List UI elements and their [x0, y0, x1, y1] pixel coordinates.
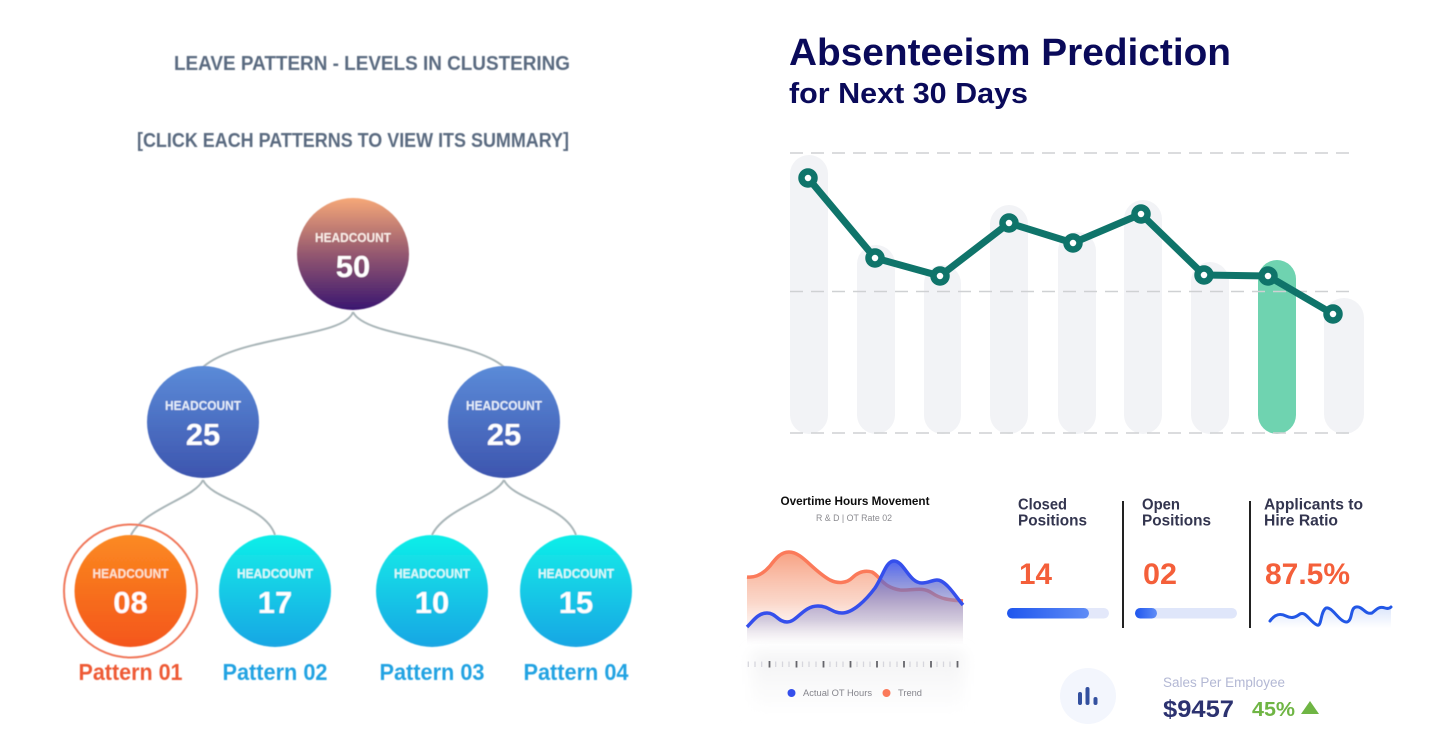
- node: headcount 25 left: 25: [186, 417, 220, 452]
- node: pattern 03: [376, 535, 488, 685]
- node: headcount 25 left: HEADCOUNT: [165, 398, 241, 413]
- kpi: open positions: Open: [1142, 496, 1180, 514]
- node: pattern 02: Pattern 02: [222, 659, 328, 685]
- panel: leave pattern clustering tree: [64, 53, 632, 685]
- line: trend: [747, 552, 963, 601]
- kpi: open positions: [1135, 496, 1237, 618]
- overtime title: Overtime Hours Movement: [780, 496, 930, 508]
- node: pattern 04: HEADCOUNT: [538, 566, 614, 581]
- node: pattern 04: Pattern 04: [524, 659, 629, 685]
- tree connectors: [131, 312, 576, 535]
- node: headcount 25 right: 25: [487, 417, 521, 452]
- legend: actual OT hours: Actual OT Hours: [803, 688, 873, 698]
- trend line: [808, 178, 1333, 314]
- kpi: applicants to hire ratio: [1264, 496, 1391, 628]
- kpi: closed positions: [1007, 496, 1109, 618]
- kpi: closed positions: 14: [1019, 558, 1052, 591]
- title: absenteeism prediction: for Next 30 Days: [789, 78, 1028, 110]
- title: absenteeism prediction: [789, 32, 1231, 110]
- card fade: [752, 652, 964, 714]
- instruction text: [CLICK EACH PATTERNS TO VIEW ITS SUMMARY]: [137, 130, 569, 152]
- area: actual: [747, 561, 963, 646]
- divider: [1249, 501, 1251, 628]
- area: trend: [747, 552, 963, 646]
- node: pattern 04: 15: [559, 585, 593, 620]
- kpi: closed positions: Closed: [1018, 496, 1067, 514]
- kpi: sales per employee: Sales Per Employee: [1163, 675, 1285, 690]
- chart: absenteeism prediction bars and line: [790, 153, 1364, 434]
- kpi: sales per employee: [1060, 668, 1319, 724]
- heading: leave pattern: LEAVE PATTERN - LEVELS IN CLUSTERING: [174, 53, 570, 75]
- title: absenteeism prediction: Absenteeism Prediction: [789, 32, 1231, 74]
- node: pattern 03: Pattern 03: [380, 659, 484, 685]
- node: headcount 50: 50: [336, 249, 370, 284]
- node: pattern 02: [219, 535, 331, 685]
- divider: [1122, 501, 1124, 628]
- panel: overtime hours movement: [747, 496, 964, 714]
- kpi: open positions: 02: [1143, 558, 1177, 591]
- icon: bar chart badge: [1060, 668, 1116, 724]
- node: pattern 01: [64, 524, 197, 685]
- highlighted bar: [1258, 260, 1296, 434]
- node: pattern 03: 10: [415, 585, 449, 620]
- legend: trend: [882, 688, 922, 698]
- overtime subtitle: R & D | OT Rate 02: [816, 513, 892, 523]
- node: pattern 02: HEADCOUNT: [237, 566, 313, 581]
- kpi: sales per employee: 45%: [1252, 699, 1295, 721]
- node: pattern 01: 08: [113, 585, 148, 620]
- node: pattern 03: HEADCOUNT: [394, 566, 470, 581]
- kpi: sales per employee: $9457: [1163, 696, 1234, 723]
- line: actual: [747, 561, 963, 627]
- node: pattern 02: 17: [258, 585, 292, 620]
- chart bars: [790, 155, 1364, 434]
- kpi: applicants to hire ratio: Hire Ratio: [1264, 512, 1338, 530]
- legend: trend: Trend: [898, 688, 922, 698]
- node: pattern 04: [520, 535, 632, 685]
- icon: up arrow: [1301, 701, 1319, 714]
- kpi: open positions: Positions: [1142, 512, 1211, 530]
- node: headcount 25 right: [448, 366, 560, 478]
- node: headcount 25 left: [147, 366, 259, 478]
- chart grid lines: [790, 153, 1352, 433]
- node: pattern 01: Pattern 01: [78, 659, 183, 685]
- kpi: closed positions: Positions: [1018, 512, 1087, 530]
- axis ticks: [748, 661, 958, 668]
- trend points: [802, 172, 1340, 320]
- node: headcount 25 right: HEADCOUNT: [466, 398, 542, 413]
- node: headcount 50: HEADCOUNT: [315, 230, 391, 245]
- kpi: applicants to hire ratio: Applicants to: [1264, 496, 1363, 514]
- node: pattern 01: HEADCOUNT: [92, 566, 169, 581]
- node: headcount 50: [297, 198, 409, 310]
- kpi: applicants to hire ratio: 87.5%: [1265, 558, 1350, 591]
